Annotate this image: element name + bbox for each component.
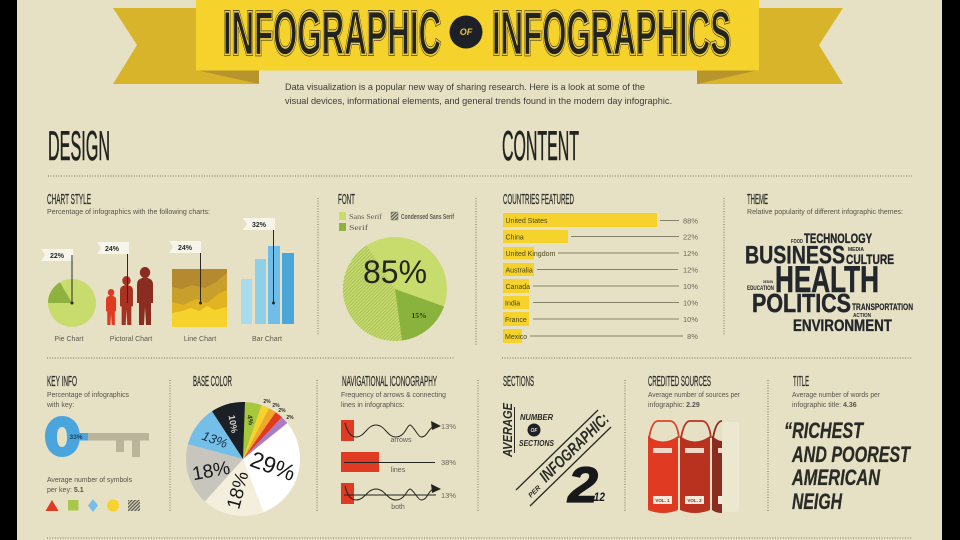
- country labels and values: 12%: [683, 249, 698, 258]
- font legend: [339, 212, 454, 232]
- pictorial chart icon: Pictoral Chart: [110, 336, 152, 343]
- symbols description: [47, 477, 132, 494]
- word cloud: TRANSPORTATION: [852, 302, 913, 312]
- panel: title: TITLE: [793, 373, 809, 390]
- both row: 13%: [441, 491, 456, 500]
- panel: chart style: [41, 191, 294, 343]
- country labels and values: India: [505, 300, 520, 308]
- panel: theme: THEME: [747, 191, 768, 208]
- example title quote: AMERICAN: [791, 465, 881, 490]
- country labels and values: 10%: [683, 282, 698, 291]
- font legend: Serif: [349, 224, 369, 232]
- panel: credited sources: CREDITED SOURCES: [648, 373, 711, 390]
- navigation description: [341, 392, 446, 409]
- font legend: Condensed Sans Serif: [401, 214, 454, 221]
- arrows row: arrows: [390, 437, 412, 444]
- word cloud: ENVIRONMENT: [793, 316, 892, 335]
- title description: infographic title: 4.36: [792, 402, 857, 409]
- sections typographic graphic: .12: [591, 490, 605, 504]
- country labels and values: 88%: [683, 216, 698, 226]
- key symbols: [46, 499, 140, 512]
- sections typographic graphic: NUMBER: [520, 413, 553, 422]
- icon: key: 33%: [69, 434, 83, 441]
- pie chart icon: 22%: [50, 253, 65, 260]
- panel: sections: [500, 373, 613, 513]
- base color pie chart: [186, 399, 300, 516]
- country labels and values: Australia: [506, 268, 533, 274]
- font pie chart: 85%: [363, 254, 427, 290]
- panel: countries featured: COUNTRIES FEATURED: [503, 191, 574, 208]
- word cloud: POLITICS: [752, 288, 851, 318]
- title: INFOGRAPHIC: [223, 0, 441, 69]
- line chart icon: [169, 241, 227, 343]
- base color pie chart: 2%: [272, 403, 280, 409]
- bar chart icon: 32%: [252, 222, 267, 229]
- word cloud: MEDIA: [848, 247, 864, 253]
- credited sources description: [648, 392, 741, 409]
- key info description: [46, 392, 129, 409]
- example title quote: “RICHEST: [784, 418, 864, 443]
- panel: base color: [186, 373, 300, 516]
- panel: chart style: CHART STYLE: [47, 191, 91, 208]
- symbols description: per key: 5.1: [47, 487, 84, 494]
- text: CONTENT: [502, 122, 579, 169]
- font pie chart: [343, 237, 447, 341]
- example title quote: AND POOREST: [791, 442, 911, 467]
- panel: sections: SECTIONS: [503, 373, 534, 390]
- word cloud: FOOD: [791, 239, 803, 245]
- panel: key info: KEY INFO: [47, 373, 77, 390]
- icon: books: VOL. 1: [655, 498, 670, 503]
- base color pie chart: 29%: [247, 446, 299, 486]
- country labels and values: [505, 216, 698, 341]
- panel: base color: BASE COLOR: [193, 373, 232, 390]
- word cloud: ACTION: [853, 313, 871, 319]
- icon: books: [648, 421, 739, 513]
- panel: navigational iconography: [341, 373, 456, 511]
- bar chart icon: [241, 218, 294, 343]
- text: DESIGN: [48, 122, 110, 169]
- word cloud: DESIGN: [763, 280, 773, 284]
- base color pie chart: 4%: [245, 414, 254, 426]
- country labels and values: 10%: [683, 315, 698, 324]
- pictorial chart icon: 24%: [105, 246, 120, 253]
- title: INFOGRAPHICS: [492, 0, 731, 69]
- intro text: Data visualization is a popular new way of sharing research. Here is a look at some of the: [285, 82, 645, 93]
- panel: countries featured: [503, 191, 698, 343]
- intro text: visual devices, informational elements, and general trends found in the modern day infographic.: [285, 96, 672, 107]
- navigation description: lines in infographics:: [341, 402, 404, 409]
- both row: [341, 483, 456, 511]
- country labels and values: United States: [506, 218, 548, 225]
- base color pie chart: 2%: [263, 399, 271, 405]
- panel: title: [784, 373, 911, 514]
- font legend: Sans Serif: [349, 213, 383, 221]
- country labels and values: 12%: [683, 266, 698, 274]
- key info description: with key:: [46, 402, 74, 409]
- panel: theme: [745, 191, 913, 335]
- country labels and values: Canada: [506, 284, 530, 291]
- panel: key info: [45, 373, 149, 512]
- word cloud: TECHNOLOGY: [804, 230, 872, 246]
- key info description: Percentage of infographics: [47, 392, 129, 399]
- arrows row: [341, 420, 456, 444]
- arrows row: 13%: [441, 422, 456, 431]
- lines row: [341, 452, 456, 474]
- sections typographic graphic: 2: [567, 457, 598, 513]
- word cloud: BUSINESS: [745, 242, 845, 270]
- country labels and values: 22%: [683, 232, 698, 242]
- word cloud: HEALTH: [775, 259, 879, 300]
- theme description: Relative popularity of different infographic themes:: [747, 209, 903, 216]
- panel: navigational iconography: NAVIGATIONAL ICONOGRAPHY: [342, 373, 437, 390]
- country labels and values: United Kingdom: [506, 251, 555, 258]
- country labels and values: 10%: [683, 298, 698, 308]
- country labels and values: China: [506, 234, 524, 242]
- lines row: lines: [391, 467, 406, 474]
- base color pie chart: 2%: [286, 415, 294, 421]
- country labels and values: France: [505, 317, 527, 324]
- chart style description: Percentage of infographics with the following charts:: [47, 209, 210, 216]
- title: INFOGRAPHIC: [223, 0, 441, 69]
- navigation description: Frequency of arrows & connecting: [341, 392, 446, 399]
- base color pie chart: 18%: [191, 458, 232, 485]
- sections typographic graphic: PER: [527, 485, 542, 499]
- both row: both: [391, 504, 405, 511]
- intro text: [285, 82, 672, 107]
- sections typographic graphic: OF: [531, 428, 538, 434]
- panel: font: [338, 191, 454, 341]
- sections typographic graphic: INFOGRAPHIC:: [536, 410, 613, 486]
- panel: font: FONT: [338, 191, 355, 208]
- font pie chart: 15%: [412, 311, 426, 320]
- pictorial chart icon: [97, 242, 153, 343]
- title: INFOGRAPHICS: [492, 0, 731, 69]
- base color pie chart: 13%: [200, 428, 230, 451]
- base color pie chart: 10%: [227, 414, 239, 434]
- symbols description: Average number of symbols: [47, 477, 132, 484]
- sections typographic graphic: SECTIONS: [519, 439, 555, 448]
- title description: [792, 392, 881, 409]
- bar chart icon: Bar Chart: [252, 336, 282, 343]
- sections typographic graphic: AVERAGE: [500, 403, 515, 458]
- base color pie chart: 2%: [278, 408, 286, 414]
- credited sources description: infographic: 2.29: [648, 402, 700, 409]
- sections typographic graphic: [500, 403, 613, 513]
- title: OF: [460, 27, 473, 37]
- icon: books: VOL. 2: [687, 498, 702, 503]
- credited sources description: Average number of sources per: [648, 392, 741, 399]
- word cloud: [745, 230, 913, 335]
- line chart icon: 24%: [178, 245, 193, 252]
- banner ribbon: [113, 0, 843, 84]
- country bars: [503, 213, 683, 343]
- country labels and values: Mexico: [505, 334, 527, 341]
- word cloud: EDUCATION: [747, 286, 774, 292]
- word cloud: CULTURE: [846, 251, 894, 267]
- title description: Average number of words per: [792, 392, 881, 399]
- base color pie chart: 18%: [223, 469, 254, 511]
- lines row: 38%: [441, 458, 456, 467]
- pie chart icon: Pie Chart: [54, 336, 84, 343]
- example title quote: [784, 418, 911, 514]
- country labels and values: 8%: [687, 332, 698, 341]
- panel: credited sources: [648, 373, 741, 513]
- line chart icon: Line Chart: [184, 336, 216, 343]
- pie chart icon: [41, 249, 96, 343]
- example title quote: NEIGH: [792, 489, 843, 514]
